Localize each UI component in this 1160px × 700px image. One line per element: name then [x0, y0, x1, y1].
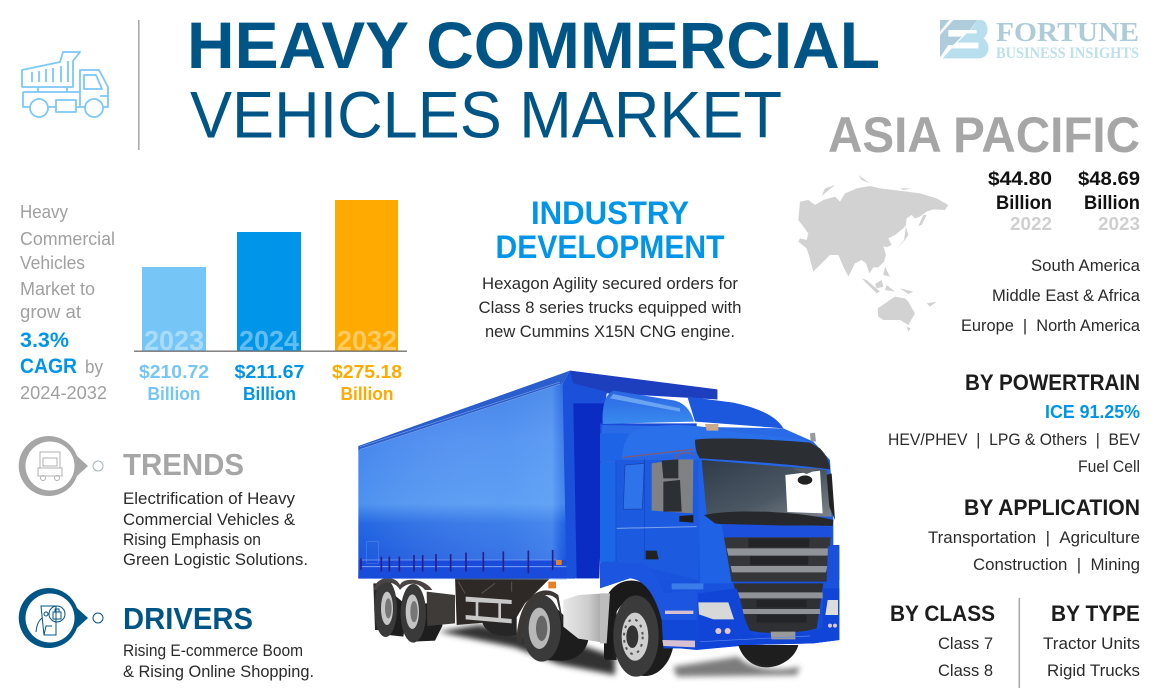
segment: by class: Class 7 — [938, 634, 993, 653]
segment: by application: Construction | Mining — [973, 555, 1140, 574]
text: market growth: Heavy — [20, 202, 68, 222]
heading: drivers: DRIVERS — [123, 601, 253, 636]
text: market growth — [20, 202, 115, 403]
icon: trends — [19, 436, 103, 496]
segment: by powertrain: ICE 91.25% — [1045, 402, 1140, 422]
heading: trends: TRENDS — [123, 447, 244, 482]
text: drivers: Rising E-commerce Boom — [123, 641, 303, 660]
segment: by type — [1043, 601, 1140, 680]
bar chart — [134, 200, 407, 404]
text: market growth: Vehicles — [20, 253, 85, 273]
segment: by application: Transportation | Agriculture — [928, 528, 1140, 547]
divider: header — [138, 20, 140, 150]
text: other regions: Middle East & Africa — [992, 286, 1141, 305]
text: industry development: Hexagon Agility secured orders for — [482, 274, 738, 293]
bar chart: Billion — [340, 383, 394, 404]
title: VEHICLES MARKET — [190, 78, 782, 152]
heading: industry development — [496, 195, 725, 265]
logo: Fortune Business Insights: FORTUNE — [996, 17, 1139, 47]
text: drivers: & Rising Online Shopping. — [123, 662, 314, 681]
text: trends — [123, 489, 308, 569]
bar chart: Billion — [243, 383, 296, 404]
regional values — [988, 169, 1140, 234]
segment: by powertrain: Fuel Cell — [1078, 457, 1140, 476]
text: trends: Electrification of Heavy — [123, 489, 295, 508]
bar chart: 2024 — [239, 325, 299, 356]
regional values: $44.80 — [988, 169, 1052, 190]
segment: by powertrain — [888, 370, 1141, 476]
text: trends: Green Logistic Solutions. — [123, 550, 308, 569]
text: industry development — [478, 274, 742, 341]
bar chart: $211.67 — [234, 361, 304, 382]
segment: by powertrain: BY POWERTRAIN — [965, 370, 1140, 395]
title — [187, 8, 880, 152]
text: market growth: grow at — [20, 302, 81, 322]
illustration: blue truck — [358, 371, 839, 677]
heading: industry development: DEVELOPMENT — [496, 229, 725, 265]
map: Asia Pacific — [798, 175, 948, 332]
regional values: Billion — [1084, 193, 1140, 214]
truck undercarriage — [373, 577, 617, 675]
text: industry development: Class 8 series trucks equipped with — [478, 298, 742, 317]
regional values: Billion — [996, 193, 1052, 214]
text: market growth: by — [85, 357, 103, 377]
segment: by class — [890, 601, 995, 680]
text: market growth: 3.3% — [20, 329, 69, 352]
regional values: 2022 — [1010, 214, 1052, 234]
segment: by class: Class 8 — [938, 661, 993, 680]
logo: Fortune Business Insights: BUSINESS INSIGHTS — [996, 45, 1139, 62]
text: industry development: new Cummins X15N CNG engine. — [485, 322, 735, 341]
heading: Asia Pacific: ASIA PACIFIC — [828, 107, 1140, 163]
segment: by class: BY CLASS — [890, 601, 995, 626]
text: drivers — [123, 641, 314, 681]
title: HEAVY COMMERCIAL — [187, 8, 880, 82]
bar chart: $275.18 — [332, 361, 402, 382]
text: other regions: Europe | North America — [961, 316, 1141, 335]
segment: by type: Tractor Units — [1043, 634, 1140, 653]
text: other regions — [961, 256, 1141, 335]
truck trailer — [358, 371, 717, 588]
segment: by type: BY TYPE — [1051, 601, 1140, 626]
text: market growth: Market to — [20, 279, 95, 299]
text: trends: Commercial Vehicles & — [123, 510, 296, 529]
segment: by application: BY APPLICATION — [964, 495, 1140, 520]
icon: drivers — [19, 588, 103, 648]
text: market growth: CAGR — [20, 355, 77, 378]
regional values: $48.69 — [1078, 169, 1140, 190]
text: market growth: 2024-2032 — [20, 383, 107, 403]
bar chart: Billion — [148, 383, 200, 404]
truck cab — [600, 391, 839, 677]
text: trends: Rising Emphasis on — [123, 530, 261, 549]
bar chart: $210.72 — [139, 361, 209, 382]
regional values: 2023 — [1098, 214, 1140, 234]
icon: dump truck — [22, 52, 108, 117]
bar chart: 2032 — [337, 325, 397, 356]
logo: Fortune Business Insights — [940, 17, 1139, 62]
heading: industry development: INDUSTRY — [531, 195, 689, 231]
bar chart: 2023 — [144, 325, 204, 356]
segment: by powertrain: HEV/PHEV | LPG & Others | BEV — [888, 430, 1141, 449]
text: market growth: Commercial — [20, 229, 115, 249]
segment: by type: Rigid Trucks — [1047, 661, 1140, 680]
text: other regions: South America — [1031, 256, 1141, 275]
segment: by application — [928, 495, 1140, 574]
